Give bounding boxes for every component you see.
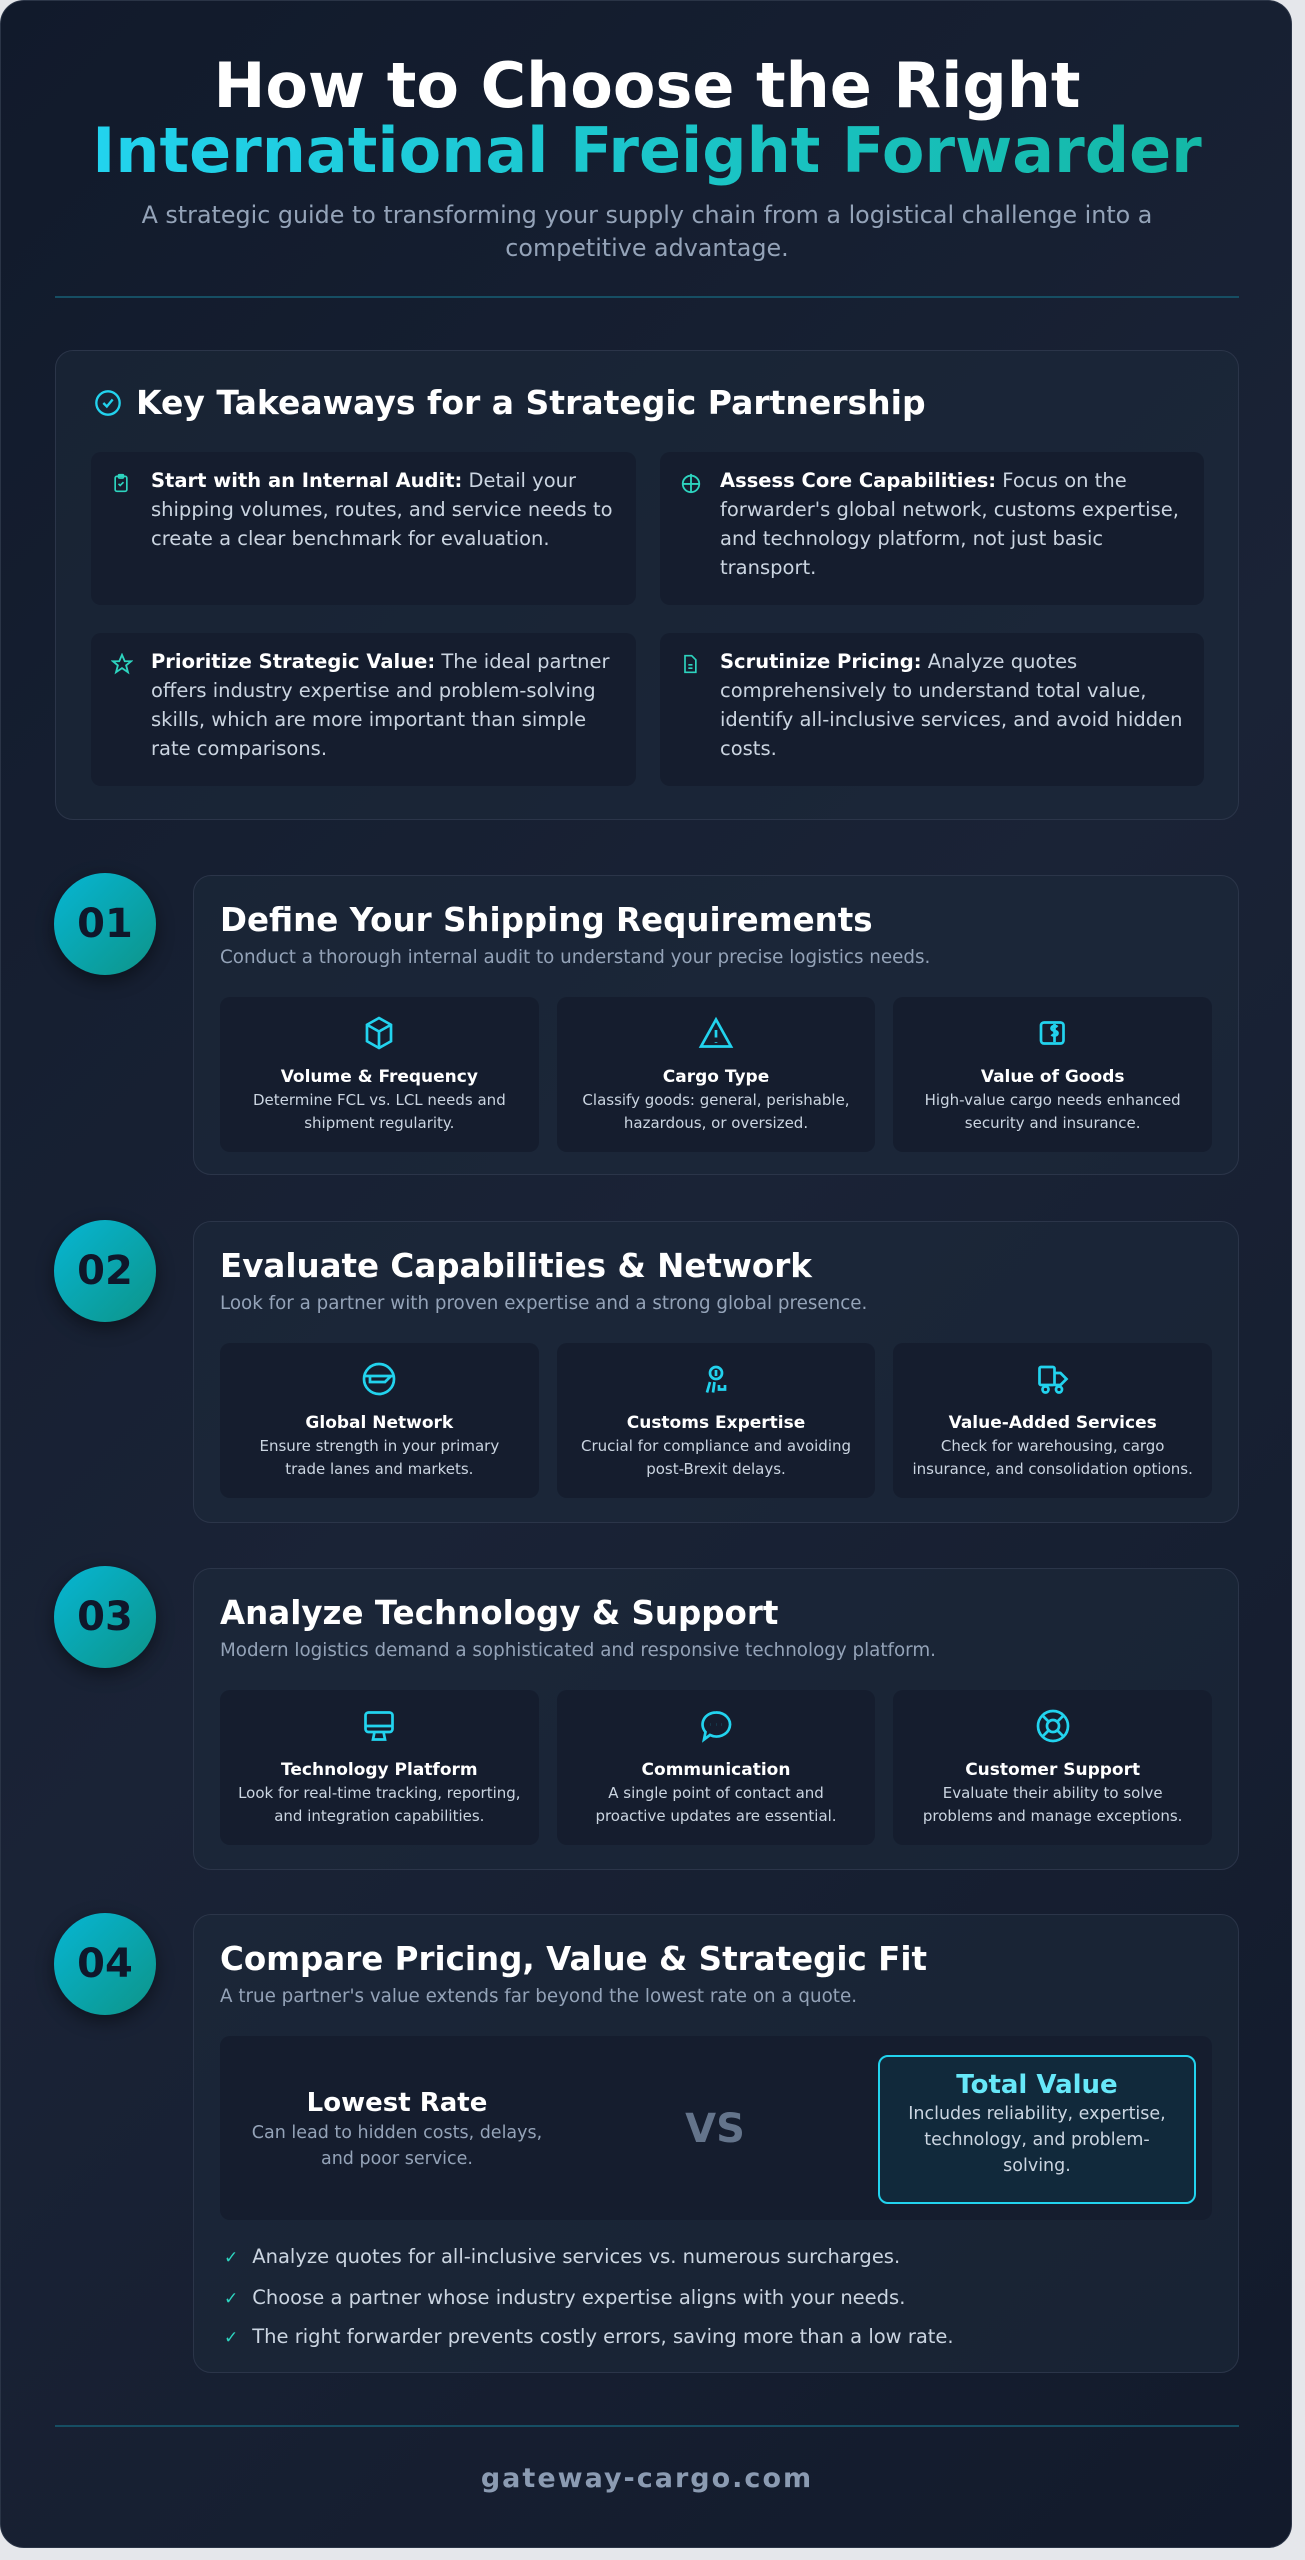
vs label: VS <box>685 2106 745 2152</box>
footer: gateway-cargo.com <box>481 2463 813 2494</box>
card: customer support: Evaluate their ability to solve problems and manage exceptions. <box>923 1784 1182 1825</box>
panel: step 1: Conduct a thorough internal audit to understand your precise logistics needs. <box>220 947 930 968</box>
total value: Total Value <box>956 2070 1118 2100</box>
card: cargo type: Cargo Type <box>663 1067 769 1087</box>
step number 03: 03 <box>77 1594 133 1640</box>
takeaway: strategic value: Prioritize Strategic Value: The ideal partner offers industry expertise and problem-solving skills, which are more important than simple rate comparisons. <box>151 650 610 760</box>
takeaway: internal audit <box>91 452 636 605</box>
step number 04 <box>54 1913 156 2015</box>
card: global network: Global Network <box>305 1413 453 1433</box>
card: value-added services <box>893 1343 1212 1498</box>
panel: step 3: Analyze Technology & Support <box>220 1594 778 1632</box>
total value: Includes reliability, expertise, technology, and problem-solving. <box>908 2104 1166 2176</box>
lowest rate <box>252 2088 542 2169</box>
panel: step 1: Define Your Shipping Requirements <box>220 901 873 939</box>
panel: step 2: Evaluate Capabilities & Network <box>220 1247 812 1285</box>
title highlight: International Freight Forwarder <box>92 114 1202 187</box>
card: technology platform: Look for real-time tracking, reporting, and integration capabilities. <box>238 1784 521 1825</box>
takeaway: core capabilities: Assess Core Capabilities: Focus on the forwarder's global network, customs expertise, and technology platform, not just basic transport. <box>720 469 1179 579</box>
checklist: ✓ Analyze quotes for all-inclusive services vs. numerous surcharges. <box>224 2245 900 2268</box>
card: volume & frequency: Determine FCL vs. LCL needs and shipment regularity. <box>253 1091 506 1132</box>
card: value of goods: High-value cargo needs enhanced security and insurance. <box>925 1091 1181 1132</box>
card: cargo type <box>557 997 875 1152</box>
panel: step 2: Look for a partner with proven expertise and a strong global presence. <box>220 1293 867 1314</box>
card: customer support <box>893 1690 1212 1845</box>
card: global network <box>220 1343 539 1498</box>
card: technology platform <box>220 1690 539 1845</box>
step number 01 <box>54 873 156 975</box>
panel: key takeaways <box>55 350 1239 820</box>
step number 02 <box>54 1220 156 1322</box>
card: global network: Ensure strength in your primary trade lanes and markets. <box>259 1437 499 1478</box>
card: customer support: Customer Support <box>965 1760 1140 1780</box>
card: value-added services: Check for warehousing, cargo insurance, and consolidation options. <box>912 1437 1193 1478</box>
card: customs expertise: Customs Expertise <box>627 1413 805 1433</box>
checklist: ✓ Choose a partner whose industry expertise aligns with your needs. <box>224 2286 905 2309</box>
takeaway: pricing <box>660 633 1204 786</box>
takeaway: strategic value <box>91 633 636 786</box>
panel: step 4: Compare Pricing, Value & Strategic Fit <box>220 1940 927 1978</box>
panel: step 1 <box>193 875 1239 1175</box>
card: value of goods <box>893 997 1212 1152</box>
panel: step 4: A true partner's value extends far beyond the lowest rate on a quote. <box>220 1986 857 2007</box>
card: customs expertise: Crucial for compliance and avoiding post-Brexit delays. <box>581 1437 851 1478</box>
card: value of goods: Value of Goods <box>981 1067 1125 1087</box>
card: volume & frequency: Volume & Frequency <box>281 1067 478 1087</box>
panel: step 4 <box>193 1914 1239 2373</box>
subtitle: A strategic guide to transforming your supply chain from a logistical challenge into a competitive advantage. <box>142 201 1152 262</box>
panel: step 3 <box>193 1568 1239 1870</box>
step number 03 <box>54 1566 156 1668</box>
title: How to Choose the Right <box>213 49 1081 122</box>
step number 02: 02 <box>77 1248 133 1294</box>
card: communication: A single point of contact and proactive updates are essential. <box>595 1784 837 1825</box>
panel: step 2 <box>193 1221 1239 1523</box>
card: technology platform: Technology Platform <box>281 1760 478 1780</box>
card: communication: Communication <box>642 1760 790 1780</box>
lowest rate: Lowest Rate <box>307 2088 487 2118</box>
card: customs expertise <box>557 1343 875 1498</box>
panel: step 3: Modern logistics demand a sophisticated and responsive technology platform. <box>220 1640 936 1661</box>
card: value-added services: Value-Added Services <box>949 1413 1157 1433</box>
card: volume & frequency <box>220 997 539 1152</box>
takeaway: pricing: Scrutinize Pricing: Analyze quotes comprehensively to understand total value, identify all-inclusive services, and avoid hidden costs. <box>720 650 1182 760</box>
lowest rate: Can lead to hidden costs, delays, and poor service. <box>252 2123 542 2169</box>
card: communication <box>557 1690 875 1845</box>
takeaway: core capabilities <box>660 452 1204 605</box>
step number 04: 04 <box>77 1941 133 1987</box>
checklist <box>224 2245 954 2348</box>
comparison: lowest rate vs total value <box>220 2036 1212 2220</box>
checklist: ✓ The right forwarder prevents costly errors, saving more than a low rate. <box>224 2325 954 2348</box>
takeaway: internal audit: Start with an Internal Audit: Detail your shipping volumes, routes, and service needs to create a clear benchmark for evaluation. <box>151 469 613 550</box>
heading: key takeaways: Key Takeaways for a Strategic Partnership <box>136 383 926 422</box>
total value <box>878 2055 1196 2204</box>
step number 01: 01 <box>77 901 133 947</box>
card: cargo type: Classify goods: general, perishable, hazardous, or oversized. <box>582 1091 850 1132</box>
